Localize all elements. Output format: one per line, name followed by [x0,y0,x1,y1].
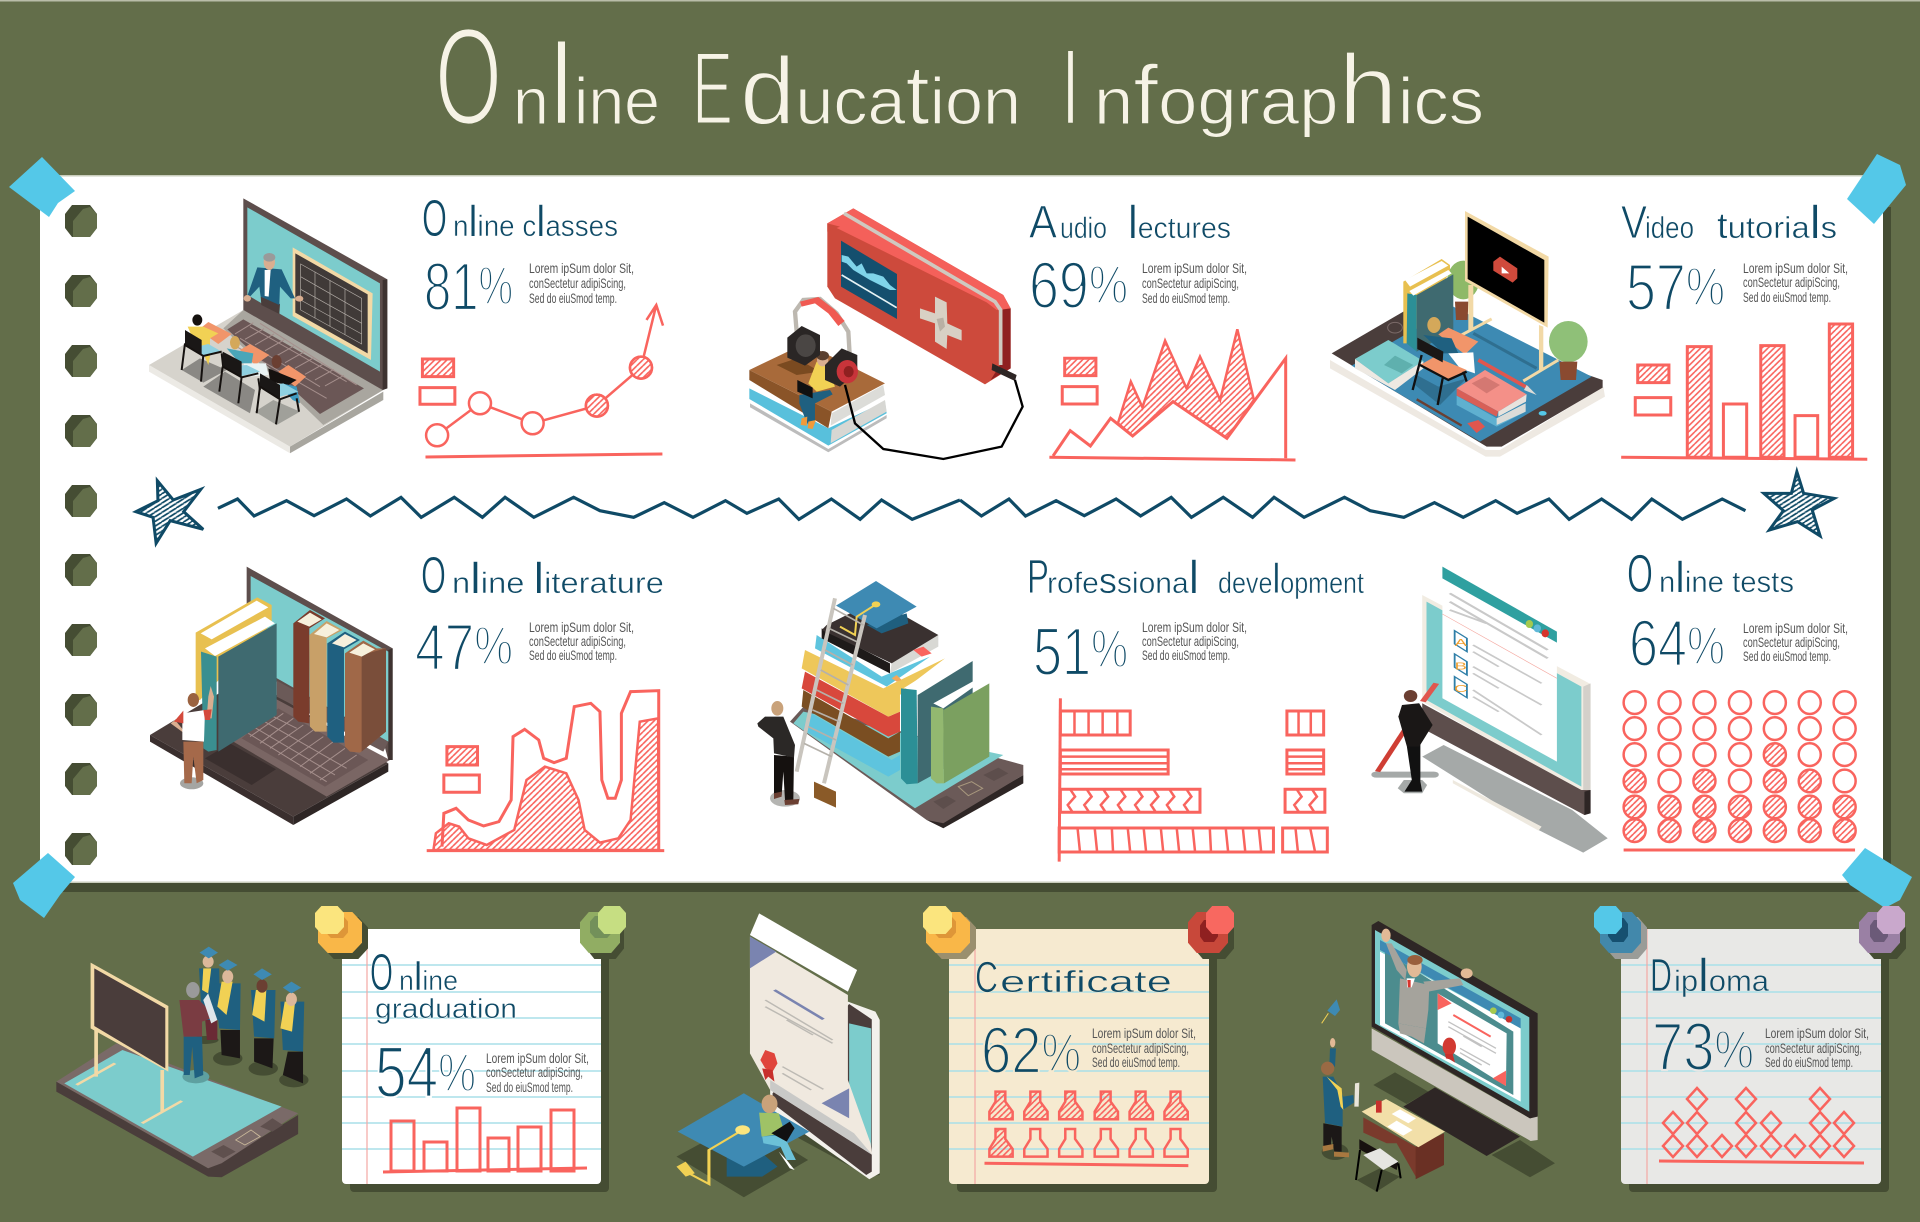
body text: conSectetur adipiScing, [1765,1040,1862,1056]
body text: Lorem ipSum dolor Sit, [1743,620,1848,636]
illustration: book stack on tablet [757,581,1023,828]
horizontal bar chart [1059,698,1327,862]
body text: conSectetur adipiScing, [1743,634,1840,650]
bar chart [383,1108,587,1172]
heading: video tutorials: V [1621,196,1647,248]
heading: audio lectures: A [1029,196,1057,248]
body text: conSectetur adipiScing, [1142,275,1239,291]
body text: conSectetur adipiScing, [529,633,626,649]
stat 51%: % [1091,619,1128,679]
heading: online tests: nline tests [1659,553,1797,602]
main title: I [1061,26,1080,147]
body text [1765,1025,1869,1070]
heading: online classes: O [422,190,447,248]
body text: Sed do eiuSmod temp. [1743,289,1831,305]
diamond pictogram chart [1659,1088,1864,1163]
body text: conSectetur adipiScing, [486,1064,583,1080]
illustration: tablet video lesson [1330,211,1605,457]
stat 69%: 69 [1029,248,1102,322]
pictogram people chart [984,1092,1188,1166]
body text [529,619,634,663]
body text [529,260,634,306]
panel: video tutorials [1330,196,1867,459]
heading: online graduation: nline [399,955,460,999]
stat 64%: % [1687,616,1725,676]
body text: Sed do eiuSmod temp. [486,1079,573,1095]
heading: professional development: development [1218,555,1380,602]
icon: right star [1764,472,1834,536]
illustration: monitor with test: A [1455,638,1467,649]
heading: professional development: P [1027,551,1049,604]
icon: left star [136,481,203,543]
illustration: audio player and books [749,208,1023,459]
heading: online literature: O [421,547,446,605]
main title: ducation [740,38,1018,145]
stat 51%: 51 [1033,614,1109,690]
tape corners [9,154,1912,918]
stat 69%: % [1089,255,1128,315]
body text: conSectetur adipiScing, [1142,633,1239,649]
body text [1142,619,1247,663]
bar chart [1621,324,1867,459]
heading: diploma: iploma [1674,949,1767,1001]
heading: online tests: O [1627,544,1653,604]
body text: Lorem ipSum dolor Sit, [1092,1025,1196,1041]
pictogram dot chart [1624,691,1856,850]
body text [1743,620,1848,664]
panel: online tests [1371,544,1856,853]
panel: notebook sheet [9,154,1912,918]
panel: professional development [757,551,1365,862]
heading: video tutorials: ideo [1645,210,1694,245]
body text: Sed do eiuSmod temp. [529,647,617,663]
body text: Lorem ipSum dolor Sit, [486,1050,589,1066]
stat 64%: 64 [1629,606,1702,680]
ruled lines [1621,929,1881,1184]
illustration: monitor with test: B [1455,661,1467,672]
stat 47%: % [474,616,513,676]
stat 47%: 47 [415,610,488,684]
pins [1594,906,1906,959]
body text: Sed do eiuSmod temp. [529,290,617,306]
body text: Lorem ipSum dolor Sit, [1142,260,1247,276]
stat 54%: 54 [375,1033,455,1113]
area chart [1049,329,1295,460]
body text: Lorem ipSum dolor Sit, [1142,619,1247,635]
panel: online classes [149,190,663,457]
illustration: monitor with test: C [1454,684,1468,695]
body text: Sed do eiuSmod temp. [1142,647,1230,663]
heading: certificate: ertificate [1000,964,1172,999]
stat 81%: % [478,256,513,316]
divider: zigzag line with stars [136,472,1834,543]
panel: note diploma [1594,906,1906,1192]
stat 62%: % [1041,1023,1081,1083]
heading: online classes: nline classes [453,197,624,246]
illustration: diploma on tablet with cap [676,913,880,1197]
heading: professional development: rofessional [1047,551,1199,603]
main title: nline [513,19,662,149]
panel: note online graduation [315,906,626,1192]
smooth area chart [427,691,664,851]
main title: nfographics [1094,34,1479,146]
body text: Sed do eiuSmod temp. [1765,1054,1853,1070]
stat 57%: % [1686,257,1725,317]
heading: online graduation: graduation [375,993,517,1024]
body text [1142,260,1247,306]
body text: Lorem ipSum dolor Sit, [1765,1025,1869,1041]
body text: conSectetur adipiScing, [529,275,626,291]
body text: Sed do eiuSmod temp. [1743,648,1831,664]
stat 54%: % [438,1043,476,1103]
body text: conSectetur adipiScing, [1092,1040,1189,1056]
body text: conSectetur adipiScing, [1743,274,1840,290]
body text [1092,1025,1196,1070]
body text: Sed do eiuSmod temp. [1142,290,1230,306]
stat 73%: 73 [1652,1009,1728,1085]
stat 57%: 57 [1626,250,1699,324]
main title: O [435,0,502,154]
main title: E [692,31,733,147]
heading: video tutorials: tutorials [1717,196,1836,248]
illustration: graduation on phone [56,947,309,1177]
stat 73%: % [1714,1020,1754,1080]
body text [486,1050,589,1095]
panel: audio lectures [749,196,1295,460]
binder holes [65,205,97,865]
body text: Lorem ipSum dolor Sit, [529,260,634,276]
illustration: graduation ceremony on monitor [1321,921,1555,1192]
stat 62%: 62 [981,1013,1054,1087]
heading: audio lectures: lectures [1128,196,1236,248]
ruled lines [342,929,601,1184]
zigzag line [218,497,1745,519]
illustration: laptop classroom [149,198,387,453]
pins [923,906,1234,959]
stat 81%: 81 [424,249,500,325]
heading: certificate: C [975,953,998,1002]
body text: Sed do eiuSmod temp. [1092,1054,1180,1070]
pins [315,906,626,959]
line chart with arrow [420,305,663,457]
illustration: monitor with test [1371,567,1608,853]
body text: Lorem ipSum dolor Sit, [529,619,634,635]
ruled lines [949,929,1209,1184]
panel: online literature [150,547,664,851]
illustration: laptop with books [150,567,393,825]
heading: diploma: D [1650,949,1672,1001]
body text [1743,260,1848,305]
heading: online graduation: O [370,944,393,1002]
body text: Lorem ipSum dolor Sit, [1743,260,1848,276]
panel: note certificate [923,906,1234,1192]
heading: audio lectures: udio [1060,212,1107,245]
heading: online literature: nline literature [452,554,654,603]
